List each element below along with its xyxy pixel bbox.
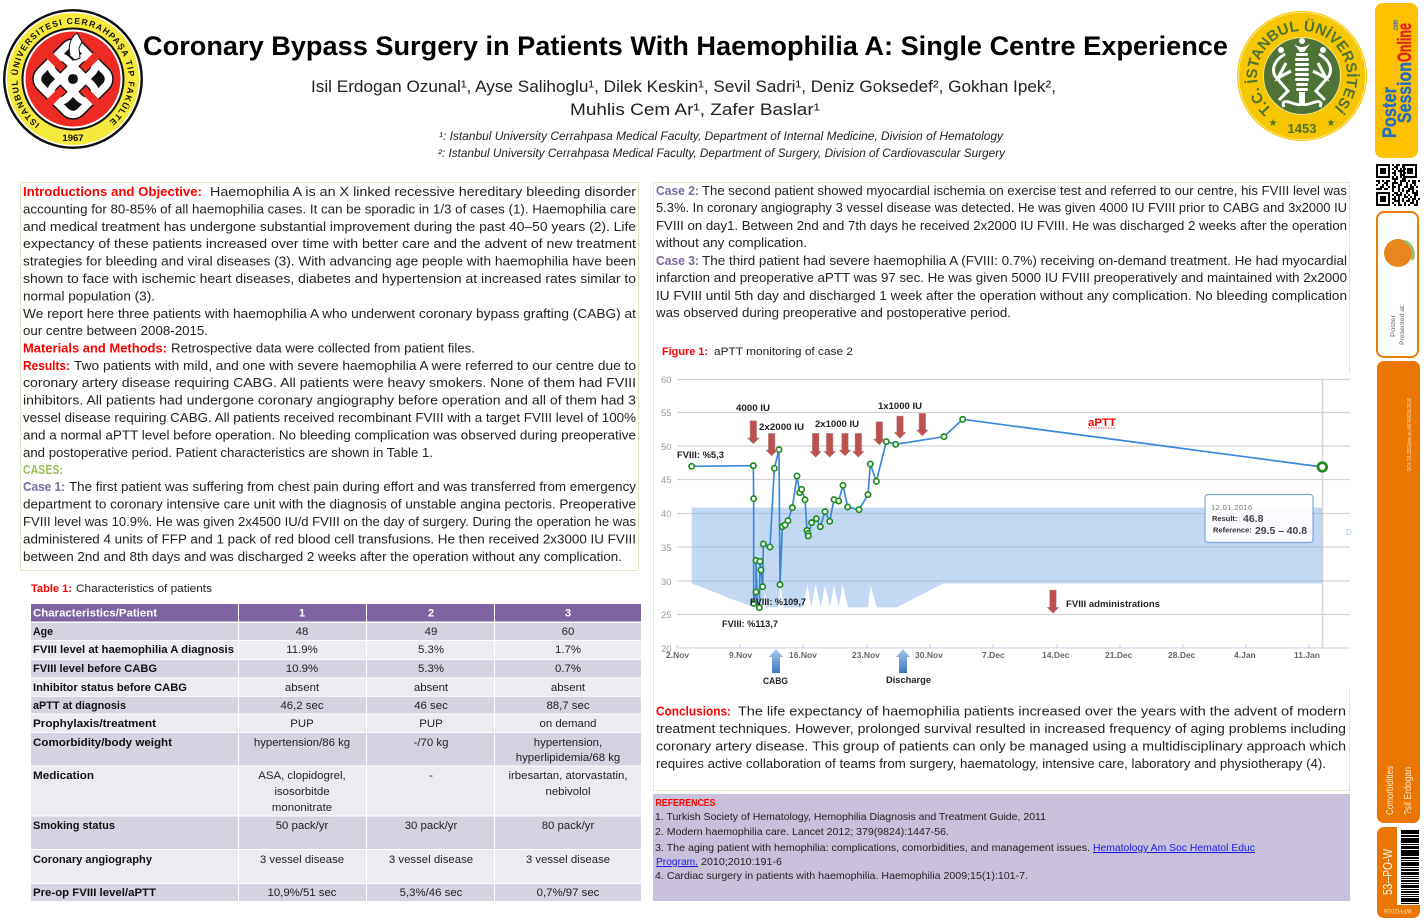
reference list: 4. Cardiac surgery in patients with haemophilia. Haemophilia 2009;15(1):101-7. xyxy=(655,871,1028,882)
table values: 10.9% xyxy=(286,663,318,675)
table header: 3 xyxy=(565,608,571,620)
text block: results: coronary artery disease requiring CABG. All patients were heavy smokers. None of them had FVIII xyxy=(23,375,636,390)
table: characteristics of patients xyxy=(31,604,641,901)
table values: 60 xyxy=(562,626,574,638)
table values: absent xyxy=(414,682,449,694)
text block: conclusions xyxy=(656,704,1346,771)
reference list: Program. xyxy=(656,857,698,868)
chart annotations: 4000 IU xyxy=(736,403,770,414)
chart: aPTT monitoring of case 2 xyxy=(655,374,1352,689)
table values: ASA, clopidogrel, xyxy=(258,770,346,782)
title: Coronary Bypass Surgery in Patients With Haemophilia A: Single Centre Experience xyxy=(143,31,1228,61)
sidebar: PosterSessionOnline banner: Poster xyxy=(1380,86,1401,138)
table values: absent xyxy=(551,682,586,694)
text block: introduction: and medical treatment has undergone substantial improvement during the past 40–50 years (2). Life xyxy=(23,219,636,234)
reference list: Hematology Am Soc Hematol Educ xyxy=(1093,843,1255,854)
table values: 46 sec xyxy=(414,700,448,712)
table header: 1 xyxy=(299,608,305,620)
text block: case 2 xyxy=(655,183,1347,250)
x axis labels: 2.Nov xyxy=(666,650,689,660)
reference list: 2010;2010:191-6 xyxy=(701,857,782,868)
text block: conclusions: treatment techniques. However, prolonged survival resulted in increased frequency of aging problems including xyxy=(656,721,1346,736)
y axis labels: 35 xyxy=(661,543,672,554)
sidebar: poster code and barcode: WFH2016 xyxy=(1384,907,1412,914)
text block: results: vessel disease requiring CABG. All patients received recombinant FVIII with a target FVIII level of 100% xyxy=(23,410,636,425)
table values: 5.3% xyxy=(418,663,444,675)
text block: methods: Retrospective data were collected from patient files. xyxy=(171,340,475,356)
FVIII administration arrows xyxy=(747,413,1059,613)
table values: 30 pack/yr xyxy=(405,820,457,832)
table values: - xyxy=(429,770,433,782)
table values: nebivolol xyxy=(546,786,590,798)
x axis labels: 16.Nov xyxy=(789,650,817,660)
chart annotations: FVIII: %113,7 xyxy=(722,619,778,630)
table values: 80 pack/yr xyxy=(542,820,594,832)
text block: case 2: The second patient showed myocardial ischemia on exercise test and referred to our centre, his FVIII level was xyxy=(702,183,1347,198)
text block: case 2: without any complication. xyxy=(655,235,807,250)
table values: mononitrate xyxy=(272,802,332,814)
table values: irbesartan, atorvastatin, xyxy=(508,770,628,782)
table values: PUP xyxy=(290,718,314,730)
table values: absent xyxy=(285,682,320,694)
table row labels: Pre-op FVIII level/aPTT xyxy=(33,887,156,899)
y axis labels: 45 xyxy=(661,475,672,486)
table values: PUP xyxy=(419,718,443,730)
table values: 48 xyxy=(296,626,308,638)
tooltip: 46.8 xyxy=(1243,513,1264,525)
x axis labels xyxy=(666,650,1320,660)
table values: -/70 kg xyxy=(414,737,448,749)
table values: 3 vessel disease xyxy=(260,854,344,866)
table values: hyperlipidemia/68 kg xyxy=(516,752,620,764)
text block: case 1: between 2nd and 8th days and was discharged 2 weeks after the operation without any complication. xyxy=(23,549,622,564)
table values: 5.3% xyxy=(418,644,444,656)
sidebar: orange metadata strip: ?sil Erdogan xyxy=(1403,767,1414,815)
table caption: Table 1: xyxy=(31,583,72,595)
text block: case 2: 5.3%. In coronary angiography 3 vessel disease was detected. He was given 4000 IU FVIII prior to CABG and 3x2000 IU xyxy=(656,200,1347,215)
QR code xyxy=(1376,164,1420,206)
tooltip: Result: xyxy=(1212,514,1237,523)
text block: introduction: expectancy of these patients increased over time with better care and the advent of new treatment xyxy=(23,236,636,251)
text block: case 1: department to coronary intensive care unit with the diagnosis of unstable angina pectoris. Preoperative xyxy=(23,496,636,512)
chart annotations: CABG xyxy=(763,676,788,687)
table values: 49 xyxy=(425,626,437,638)
chart annotations: FVIII administrations xyxy=(1066,599,1160,610)
reference list: 1. Turkish Society of Hematology, Hemophilia Diagnosis and Treatment Guide, 2011 xyxy=(655,812,1046,823)
x axis labels: 14.Dec xyxy=(1042,650,1070,660)
table header xyxy=(33,608,571,620)
table row labels: Inhibitor status before CABG xyxy=(33,682,187,694)
text block: results xyxy=(23,358,636,460)
y axis labels: 40 xyxy=(661,509,672,520)
table values: 11.9% xyxy=(286,644,318,656)
chart annotations: FVIII: %109,7 xyxy=(750,597,806,608)
text block: conclusions: requires active collaboration of teams from surgery, haematology, intensive care, laboratory and physiotherapy (4). xyxy=(656,756,1326,771)
arrow: discharge day xyxy=(896,649,910,673)
table row labels: FVIII level before CABG xyxy=(33,663,157,675)
affiliations xyxy=(438,130,1006,160)
sidebar: presented-at box: Poster xyxy=(1390,314,1397,337)
text block: results: and a normal aPTT level before operation. No bleeding complication was observed during preoperative xyxy=(23,428,636,442)
table values: 46,2 sec xyxy=(280,700,324,712)
y axis labels xyxy=(661,375,672,655)
text block: case 1: FVIII level was 10.9%. He was given 2x4500 IU/d FVIII on the day of surgery. During the operation he was xyxy=(23,514,636,529)
x axis labels: 7.Dec xyxy=(982,650,1005,660)
text block: introduction: accounting for 80-85% of all haemophilia cases. It can be sporadic in 1/3 of cases (1). Haemophilia care xyxy=(23,202,636,216)
table row labels: Smoking status xyxy=(33,820,115,832)
heading: references: REFERENCES xyxy=(656,798,716,809)
table values: on demand xyxy=(540,718,596,730)
sidebar: orange metadata strip: Comorbidities xyxy=(1385,766,1396,815)
table values: 3 vessel disease xyxy=(526,854,610,866)
table values: 0.7% xyxy=(555,663,581,675)
x axis labels: 9.Nov xyxy=(729,650,752,660)
logo: Istanbul University seal: ★ xyxy=(1327,118,1336,129)
text block: results: inhibitors. All patients had undergone coronary angiography before operation and all of them had 3 xyxy=(23,392,636,408)
table values: 10,9%/51 sec xyxy=(267,887,337,899)
y axis labels: 55 xyxy=(661,408,672,419)
chart annotations: Discharge xyxy=(886,675,931,686)
sidebar: orange metadata strip: DOI: 10.3252/pso.eu.WFH2016.2016 xyxy=(1407,398,1413,471)
text block: conclusions: coronary artery disease. This group of patients can only be managed using a multidisciplinary approach which xyxy=(656,738,1346,754)
table values: hypertension/86 kg xyxy=(254,737,350,749)
x axis labels: 23.Nov xyxy=(852,650,880,660)
panel: introduction, methods, results, case 1 xyxy=(20,182,638,570)
heading: case 2: Case 2: xyxy=(656,183,699,198)
x axis labels: 30.Nov xyxy=(915,650,943,660)
heading: case 3: Case 3: xyxy=(656,253,699,268)
sidebar: PosterSessionOnline banner: .com xyxy=(1391,20,1400,31)
x axis labels: 21.Dec xyxy=(1105,650,1133,660)
figure caption xyxy=(662,346,853,358)
chart annotations: 2x2000 IU xyxy=(759,422,804,433)
text block: introduction: shown to face with ischemic heart diseases, diabetes and hypertension at increased rates similar to xyxy=(23,271,636,286)
sidebar: presented-at box xyxy=(1377,212,1418,357)
heading: conclusions: Conclusions: xyxy=(656,704,731,718)
text block: case 3: IU FVIII until 5th day and discharged 1 week after the operation without any complication. No bleeding complication xyxy=(656,288,1347,303)
tooltip: 29.5 – 40.8 xyxy=(1255,525,1307,537)
text block: introduction: strategies for bleeding and viral diseases (3). With advancing age people with haemophilia have been xyxy=(23,254,636,268)
heading: results: Results: xyxy=(23,358,70,373)
sidebar: poster code and barcode xyxy=(1377,827,1420,918)
text block: case 3: The third patient had severe haemophilia A (FVIII: 0.7%) receiving on-demand treatment. He had myocardial xyxy=(702,253,1347,268)
text block: introduction xyxy=(23,184,637,338)
affiliations: ¹: Istanbul University Cerrahpasa Medical Faculty, Department of Internal Medicine, Division of Hematology xyxy=(439,130,1004,143)
text block: introduction: our centre between 2008-2015. xyxy=(23,323,208,338)
y axis labels: 20 xyxy=(661,644,672,655)
table values: 50 pack/yr xyxy=(276,820,328,832)
table values: 5,3%/46 sec xyxy=(400,887,463,899)
table values: 3 vessel disease xyxy=(389,854,473,866)
authors: Muhlis Cem Ar¹, Zafer Baslar¹ xyxy=(570,100,820,119)
text block: case 1: The first patient was suffering from chest pain during effort and was transferred from emergency xyxy=(69,479,637,494)
reference list xyxy=(655,812,1255,882)
logo: Istanbul University seal: ★ xyxy=(1269,118,1278,129)
table row labels: Medication xyxy=(33,770,94,782)
tooltip: 12.01.2016 xyxy=(1211,503,1253,512)
y axis labels: 30 xyxy=(661,577,672,588)
table row labels xyxy=(33,626,234,899)
logo: Cerrahpasa medical faculty seal: 1967 xyxy=(62,133,84,144)
table row labels: aPTT at diagnosis xyxy=(33,700,126,712)
heading: cases: CASES: xyxy=(23,462,63,477)
sidebar: poster code and barcode: 53--PO-W xyxy=(1381,849,1395,895)
icon: congress badge xyxy=(1384,239,1413,267)
affiliations: ²: Istanbul University Cerrahpasa Medical Faculty, Department of Surgery, Division of Cardiovascular Surgery xyxy=(438,147,1006,160)
table row labels: Coronary angiography xyxy=(33,854,153,866)
heading: introductions and objective: Introductions and Objective: xyxy=(23,184,202,199)
heading: case 1: Case 1: xyxy=(23,479,65,494)
table row labels: Age xyxy=(33,626,53,638)
table values: hypertension, xyxy=(534,737,602,749)
text block: conclusions: The life expectancy of haemophilia patients increased over the years with the advent of modern xyxy=(738,704,1346,718)
chart annotations: FVIII: %5,3 xyxy=(677,450,724,461)
text block: case 3: was observed during preoperative and postoperative period. xyxy=(655,305,1011,320)
chart annotations xyxy=(677,401,1160,687)
y axis labels: 60 xyxy=(661,375,672,386)
x axis labels: 28.Dec xyxy=(1168,650,1196,660)
sidebar: PosterSessionOnline banner xyxy=(1375,3,1418,158)
x axis labels: 4.Jan xyxy=(1234,650,1256,660)
text block: introduction: We report here three patients with haemophilia A who underwent coronary bypass grafting (CABG) at xyxy=(23,306,636,321)
reference list: 3. The aging patient with hemophilia: complications, comorbidities, and management issues. xyxy=(655,843,1090,854)
heading: materials and methods: Materials and Methods: xyxy=(23,340,167,356)
table row labels: Prophylaxis/treatment xyxy=(33,718,156,730)
table header: 2 xyxy=(428,608,434,620)
text block: results: and postoperative period. Patient characteristics are shown in Table 1. xyxy=(23,445,433,460)
logo: Istanbul University seal: T.C. İSTANBUL ÜNİVERSİTESİ xyxy=(1244,18,1360,117)
panel: case 2, case 3, figure, conclusions xyxy=(654,182,1352,790)
table values xyxy=(254,626,628,899)
table caption: Characteristics of patients xyxy=(76,583,212,595)
y axis labels: 25 xyxy=(661,610,672,621)
logo: Istanbul University seal xyxy=(1237,11,1367,141)
reference list: 2. Modern haemophilia care. Lancet 2012; 379(9824):1447-56. xyxy=(655,827,949,838)
panel: references xyxy=(653,794,1350,901)
text block: case 2: FVIII on day1. Between 2nd and 7th days he received 2x2000 IU FVIII. He was discharged 2 weeks after the operation xyxy=(656,218,1347,233)
table header: Characteristics/Patient xyxy=(33,608,157,620)
text block: case 3: infarction and preoperative aPTT was 97 sec. He was given 5000 IU FVIII preoperatively and maintained with 2x2000 xyxy=(656,270,1347,285)
authors xyxy=(311,77,1056,119)
figure caption: aPTT monitoring of case 2 xyxy=(714,346,853,358)
text block: case 1: administered 4 units of FFP and 1 pack of red blood cell transfusions. He then received 2x3000 IU FVIII xyxy=(23,532,636,546)
text block: introduction: normal population (3). xyxy=(23,288,155,304)
table values: 1.7% xyxy=(555,644,581,656)
table values: 88,7 sec xyxy=(546,700,590,712)
table values: 0,7%/97 sec xyxy=(537,887,600,899)
table row labels: FVIII level at haemophilia A diagnosis xyxy=(33,644,234,656)
figure caption: Figure 1: xyxy=(662,346,708,358)
text block: results: Two patients with mild, and one with severe haemophilia A were referred to our centre due to xyxy=(74,358,636,373)
text block: introduction: Haemophilia A is an X linked recessive hereditary bleeding disorder xyxy=(210,184,637,199)
table values: isosorbitde xyxy=(274,786,330,798)
arrow: CABG day xyxy=(769,649,783,673)
chart annotations: 2x1000 IU xyxy=(815,419,859,430)
sidebar: presented-at box: Presented at: xyxy=(1399,304,1406,345)
x axis labels: 11.Jan xyxy=(1294,650,1320,660)
series label: aPTT: aPTT xyxy=(1088,417,1116,429)
y axis labels: 50 xyxy=(661,442,672,453)
tooltip xyxy=(1205,494,1313,542)
aPTT line with markers xyxy=(689,417,1327,610)
text block: case 3 xyxy=(655,253,1347,320)
sidebar: PosterSessionOnline banner: Online xyxy=(1395,23,1416,62)
chart annotations: 1x1000 IU xyxy=(878,401,922,412)
text block: case 1 xyxy=(23,479,637,564)
reference range band xyxy=(692,508,1322,607)
chart: aPTT monitoring of case 2: D xyxy=(1346,528,1352,537)
sidebar: PosterSessionOnline banner: Session xyxy=(1395,62,1416,123)
sidebar: orange metadata strip xyxy=(1377,361,1420,823)
tooltip: Reference: xyxy=(1213,526,1252,534)
authors: Isil Erdogan Ozunal¹, Ayse Salihoglu¹, Dilek Keskin¹, Sevil Sadri¹, Deniz Goksedef², Gokhan Ipek², xyxy=(311,77,1056,96)
logo: Istanbul University seal: 1453 xyxy=(1288,121,1316,136)
table row labels: Comorbidity/body weight xyxy=(33,737,172,749)
